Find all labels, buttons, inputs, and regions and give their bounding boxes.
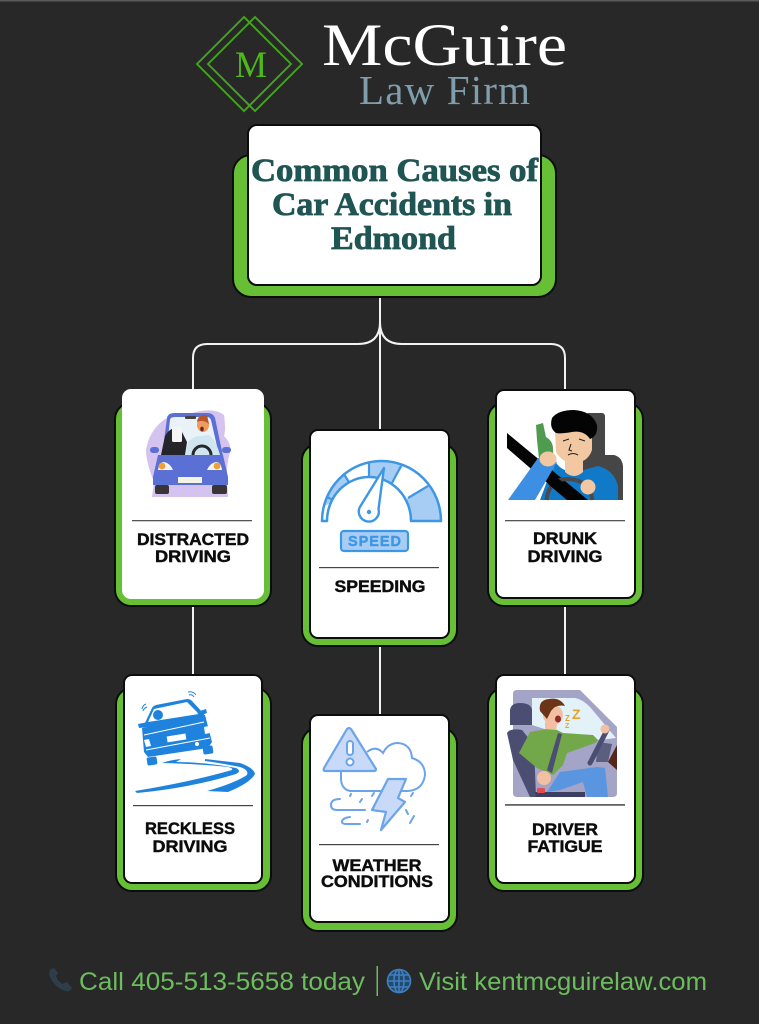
logo wordmark: Law Firm	[359, 67, 530, 113]
label: SPEEDING	[334, 578, 426, 596]
icon: sleeping driver: Z	[572, 706, 581, 722]
heading: Common Causes of	[251, 153, 539, 189]
label	[321, 857, 433, 891]
label	[137, 531, 249, 566]
label: CONDITIONS	[321, 873, 433, 891]
icon: phone	[49, 968, 72, 991]
panel: speeding	[302, 430, 457, 646]
logo wordmark: McGuire	[322, 12, 567, 78]
icon: globe	[388, 970, 410, 992]
panel: drunk driving	[488, 390, 643, 606]
heading	[251, 153, 539, 257]
label: DRIVING	[152, 838, 228, 856]
label: WEATHER	[332, 857, 422, 875]
icon: sleeping driver: Z	[565, 723, 570, 730]
icon: storm and warning	[324, 728, 425, 830]
label	[528, 821, 602, 856]
visit text: Visit kentmcguirelaw.com	[419, 968, 707, 996]
title panel	[233, 125, 556, 297]
icon: distracted driver in car	[146, 410, 231, 497]
logo wordmark	[322, 12, 567, 113]
icon: sleeping driver	[507, 690, 617, 797]
heading: Car Accidents in	[272, 187, 512, 223]
label: DRUNK	[533, 530, 597, 548]
icon: diamond monogram	[197, 17, 302, 111]
panel: reckless driving	[116, 675, 271, 891]
logo: McGuire Law Firm	[197, 12, 567, 113]
label	[145, 820, 235, 856]
panel: distracted driving	[115, 389, 271, 606]
icon: diamond monogram: M	[235, 45, 267, 86]
label: DISTRACTED	[137, 531, 249, 549]
icon: sleeping driver: Z	[565, 714, 570, 723]
connector lines	[193, 297, 565, 715]
panel: weather conditions	[302, 715, 457, 931]
icon: skidding car	[135, 692, 255, 793]
icon: drunk driver	[507, 410, 623, 500]
icon: speedometer: SPEED	[348, 534, 401, 550]
footer contact bar	[49, 966, 707, 996]
label	[528, 530, 602, 566]
label: DRIVING	[528, 548, 602, 566]
panel: driver fatigue	[488, 675, 643, 891]
label: FATIGUE	[528, 838, 602, 856]
separator	[376, 966, 378, 996]
call text: Call 405-513-5658 today	[79, 968, 366, 996]
label: DRIVING	[155, 548, 231, 566]
label: RECKLESS	[145, 820, 235, 838]
heading: Edmond	[331, 221, 456, 257]
icon: speedometer	[320, 460, 442, 552]
label: DRIVER	[532, 821, 598, 839]
